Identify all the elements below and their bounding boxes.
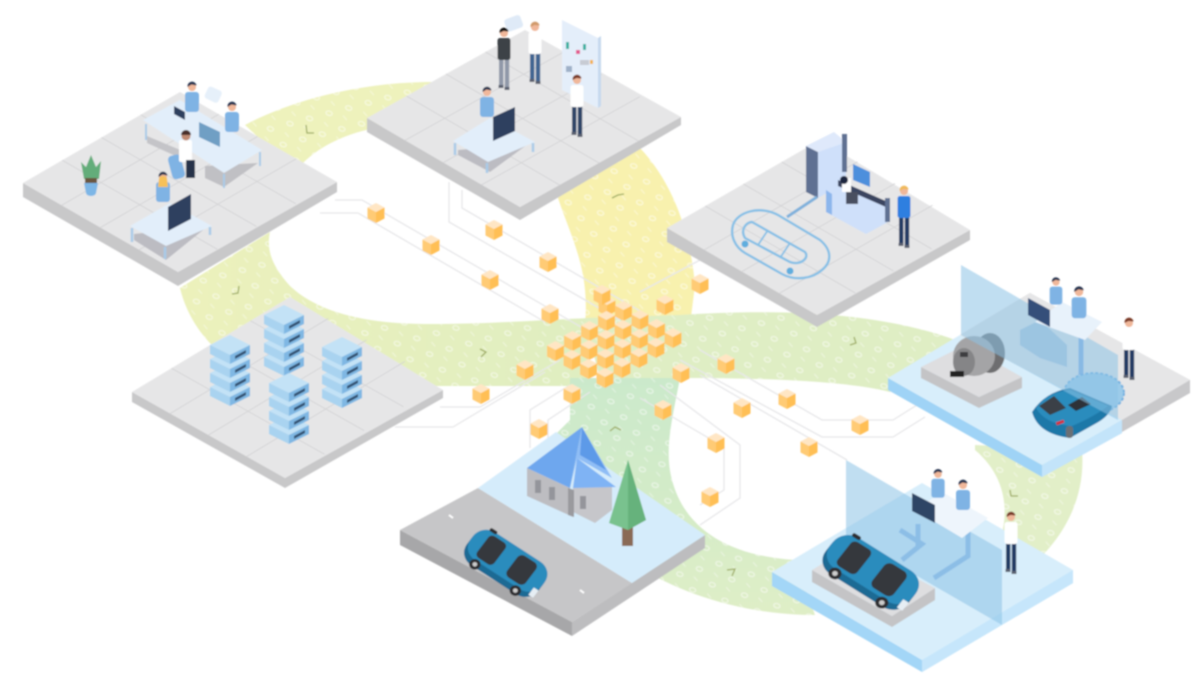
- control desk and operators: [1028, 277, 1102, 340]
- lower desk with monitor: [130, 172, 212, 260]
- standing engineer: [1122, 318, 1136, 380]
- data ribbon: lower right: [975, 445, 1082, 567]
- signal pipes: [900, 524, 968, 578]
- server stack right: [322, 337, 362, 408]
- data ribbon: right loop: [585, 312, 968, 392]
- person in dark top: [498, 28, 510, 90]
- person at whiteboard: [570, 75, 584, 137]
- translucent wall: [846, 460, 1002, 625]
- speech bubble: [503, 14, 524, 32]
- server stack left: [210, 335, 250, 406]
- person in blue: [898, 186, 910, 248]
- person in white shirt: [528, 22, 542, 84]
- icon: machine tower: [806, 132, 890, 234]
- vehicle stand: [812, 545, 935, 627]
- standing engineer: [1004, 512, 1018, 574]
- whiteboard: [562, 20, 601, 108]
- control desk and operators: [912, 469, 988, 538]
- icon: house: [527, 427, 616, 523]
- data ribbon: yellow upper loop: [558, 148, 695, 325]
- road marks: [449, 515, 584, 593]
- circuit lines: [320, 182, 925, 525]
- server stack back: [264, 305, 304, 376]
- wireframe car: [732, 197, 829, 278]
- test stand: [921, 345, 1022, 408]
- icon: blue car: [456, 522, 555, 605]
- panel: virtual design platform: [667, 132, 970, 327]
- travelling data cubes: [368, 203, 868, 507]
- translucent wall: [961, 265, 1118, 420]
- icon: motor: [950, 333, 1005, 377]
- panel: server platform: [132, 297, 443, 488]
- panel: vehicle test platform: [772, 460, 1073, 672]
- data ribbon: top arc: [245, 82, 460, 172]
- panel: powertrain test platform: [888, 265, 1190, 477]
- panel: office platform left: [23, 82, 337, 286]
- data ribbon: lower loop: [540, 378, 815, 615]
- server stack front: [269, 373, 309, 444]
- icon: blue car on stand: [813, 527, 928, 619]
- icon: car under test: [1032, 388, 1112, 438]
- icon: potted plant: [81, 155, 101, 196]
- icon: tree: [609, 460, 646, 546]
- signal pipes: [1020, 320, 1081, 375]
- desk with seated engineer: [453, 87, 535, 173]
- panel: meeting platform top: [367, 14, 681, 220]
- wire scan dome: [1064, 373, 1124, 413]
- upper desks with team: [143, 82, 262, 188]
- data ribbon: left loop: [180, 232, 590, 386]
- data cube cluster: [547, 296, 682, 388]
- panel: road and house platform: [400, 427, 705, 636]
- ribbon direction marks: [232, 125, 1018, 576]
